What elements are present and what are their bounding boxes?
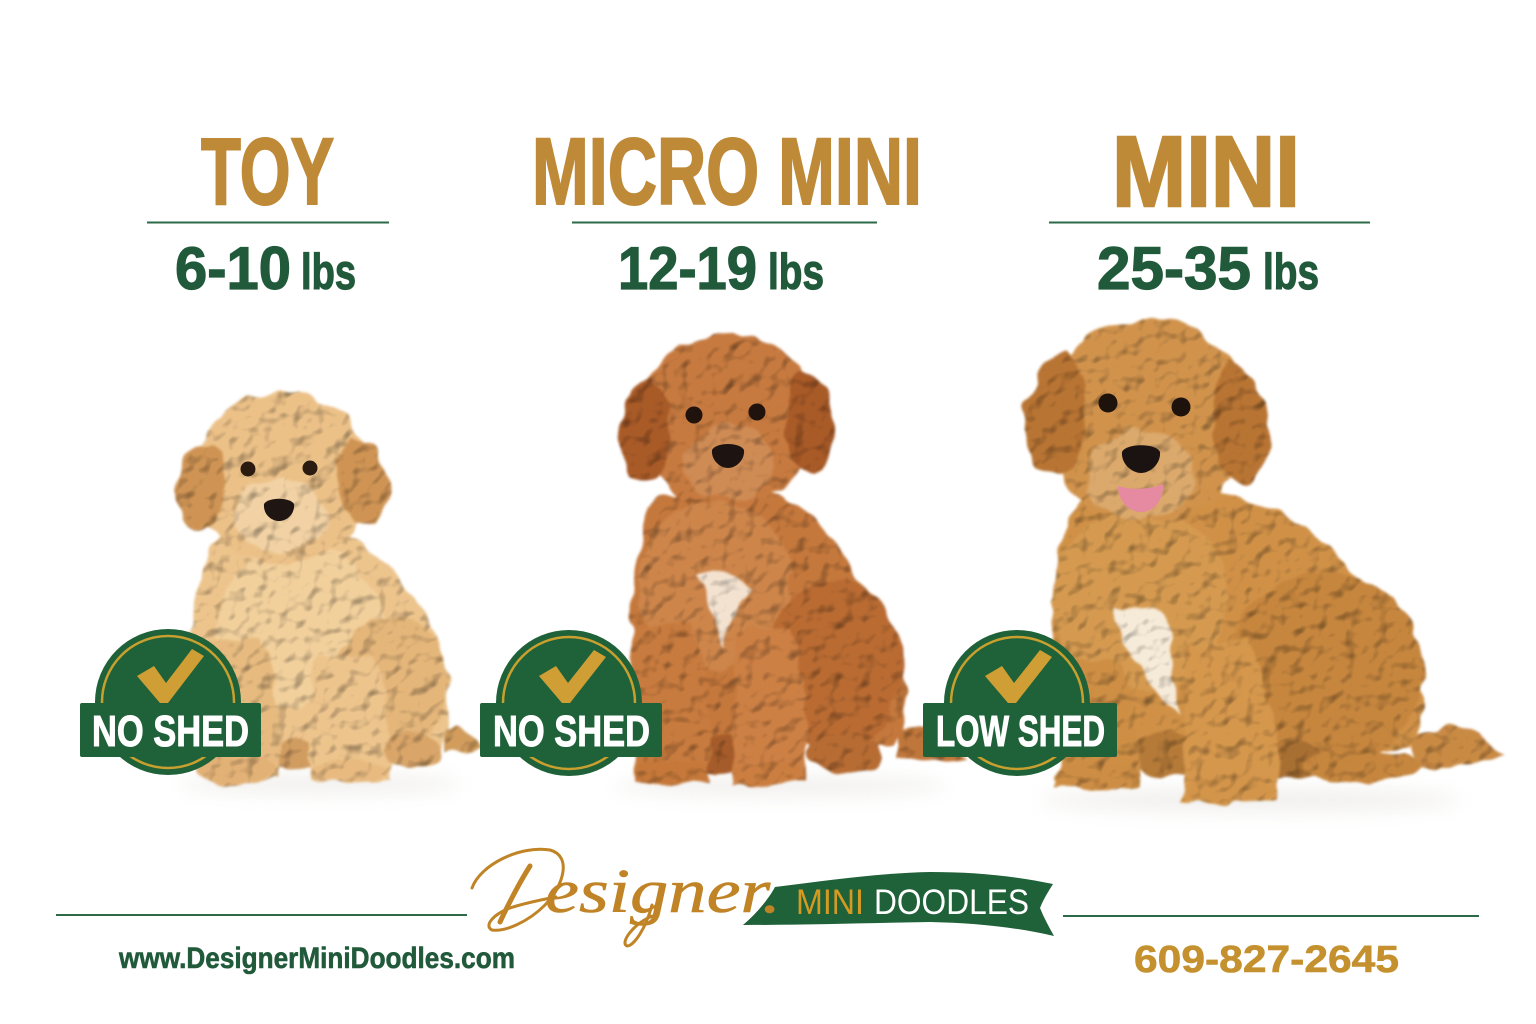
logo ribbon: DOODLES (874, 883, 1029, 922)
icon: check mark (137, 649, 204, 703)
badge: no shed (toy) (80, 629, 261, 775)
badge: no shed (micro mini) (480, 630, 662, 776)
footer rule left (56, 914, 467, 916)
title: TOY: TOY (201, 119, 334, 225)
column heading: toy (147, 119, 389, 302)
website: www.DesignerMiniDoodles.com (118, 942, 515, 975)
icon: check mark (985, 650, 1052, 703)
phone number: 609-827-2645 (1134, 939, 1399, 981)
label banner: NO SHED (493, 707, 650, 756)
label banner: NO SHED (92, 707, 249, 756)
weight: 6-10 lbs: lbs (301, 244, 356, 300)
logo script: Designer (472, 849, 781, 946)
puppy: mini (1024, 318, 1505, 812)
logo ribbon (743, 872, 1054, 936)
badge: low shed (mini) (923, 630, 1117, 776)
weight: 6-10 lbs: 6-10 (175, 235, 291, 302)
weight: 6-10 lbs (175, 235, 356, 302)
weight: 12-19 lbs: lbs (768, 244, 824, 300)
label banner (923, 703, 1117, 757)
icon: check mark (539, 650, 606, 703)
weight: 25-35 lbs: 25-35 (1097, 235, 1251, 302)
column heading: mini (1049, 116, 1370, 302)
puppy: toy (176, 393, 482, 794)
puppy: micro mini (615, 334, 968, 796)
title: MINI: MINI (1112, 116, 1300, 228)
title: MICRO MINI: MICRO MINI (532, 119, 922, 225)
logo: Designer Mini Doodles (472, 849, 1054, 946)
column heading: micro mini (532, 119, 922, 302)
logo script: Designer: esigner. (545, 858, 781, 926)
weight: 25-35 lbs (1097, 235, 1319, 302)
footer rule right (1063, 915, 1479, 917)
weight: 12-19 lbs: 12-19 (618, 235, 757, 302)
label banner: LOW SHED (936, 707, 1105, 756)
logo ribbon: MINI (796, 883, 864, 922)
weight: 25-35 lbs: lbs (1263, 244, 1319, 300)
